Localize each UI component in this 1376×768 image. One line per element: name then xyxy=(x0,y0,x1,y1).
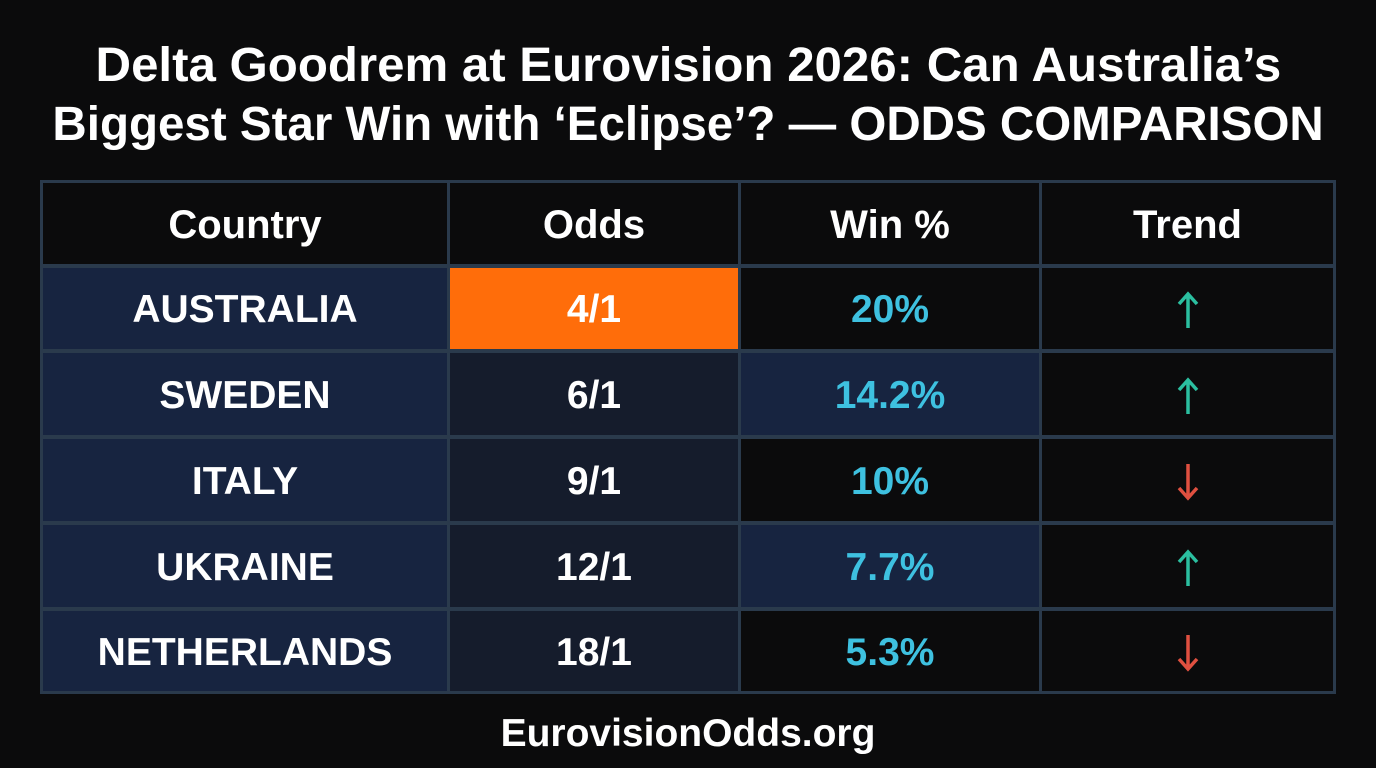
row: Netherlands: NETHERLANDS xyxy=(98,630,392,674)
odds table: 12/1 xyxy=(556,546,632,588)
header row xyxy=(43,183,447,264)
row: Sweden xyxy=(43,353,447,435)
odds table: 7.7% xyxy=(846,546,934,588)
row: Australia: AUSTRALIA xyxy=(132,288,358,331)
odds table: 18/1 xyxy=(556,630,632,674)
row: Italy: ITALY xyxy=(192,460,298,502)
title: Biggest Star Win with ‘Eclipse’? — ODDS COMPARISON xyxy=(52,98,1324,151)
title: Delta Goodrem at Eurovision 2026: Can Australia’s xyxy=(95,39,1281,92)
odds table: Odds xyxy=(543,202,645,246)
title xyxy=(52,39,1324,151)
odds table: 10% xyxy=(851,460,929,502)
row: Sweden: SWEDEN xyxy=(159,374,331,416)
odds table: 20% xyxy=(851,288,929,331)
odds table: 14.2% xyxy=(835,374,945,416)
odds table xyxy=(40,180,1336,694)
odds table: 6/1 xyxy=(567,374,621,416)
odds table: 5.3% xyxy=(846,630,934,674)
odds table: Trend xyxy=(1133,202,1242,246)
row: Australia xyxy=(43,268,447,349)
odds table: 4/1 xyxy=(567,288,621,331)
odds table: 9/1 xyxy=(567,460,621,502)
odds table: Win % xyxy=(830,202,950,246)
row: Italy xyxy=(43,439,447,521)
row: Netherlands xyxy=(43,611,447,691)
row: Ukraine: UKRAINE xyxy=(156,546,334,588)
header row: Country xyxy=(168,202,322,246)
row: Ukraine xyxy=(43,525,447,607)
footer source: EurovisionOdds.org xyxy=(501,712,875,755)
